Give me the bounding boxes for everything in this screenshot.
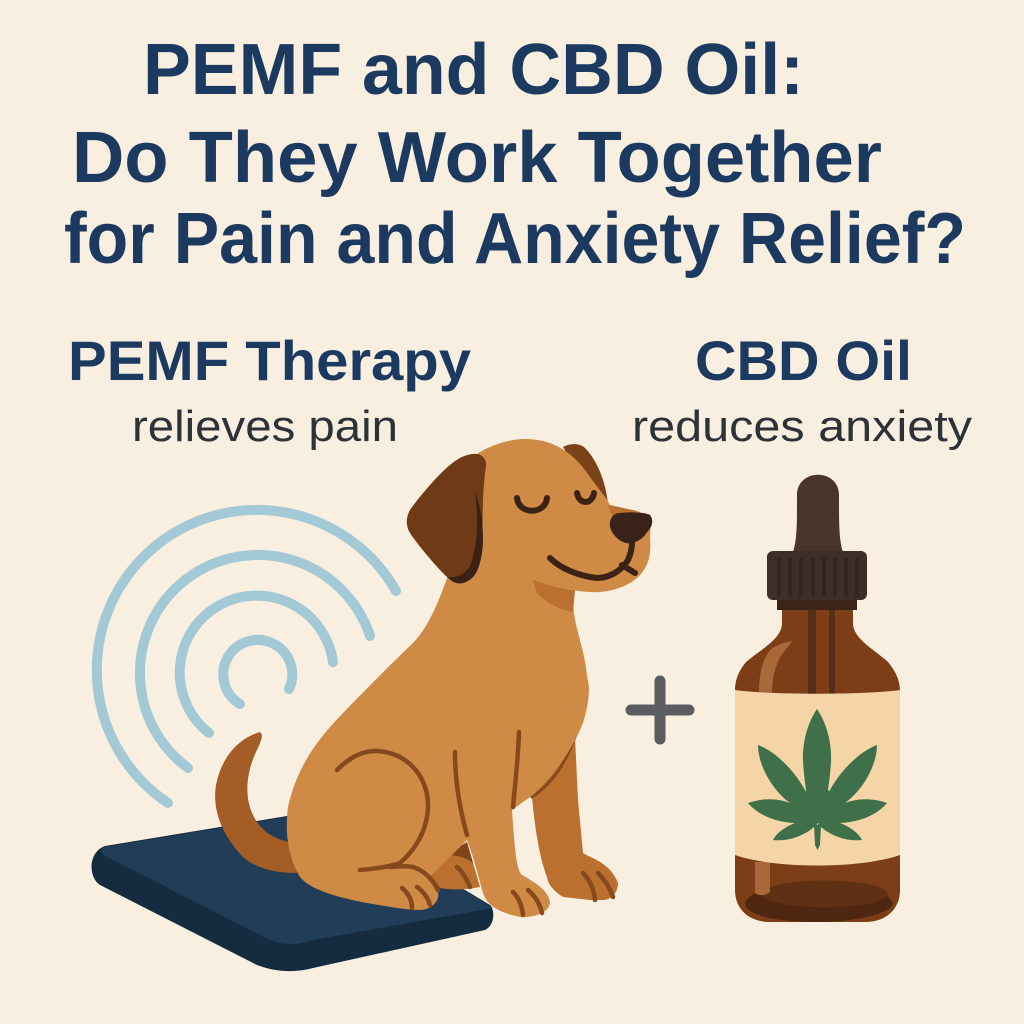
dog body and near front leg — [287, 555, 589, 917]
dropper bulb — [793, 475, 843, 552]
dog haunch line — [337, 751, 438, 890]
dog muzzle shade — [608, 505, 637, 520]
dog far ear — [563, 444, 608, 505]
icon: cannabis leaf — [748, 709, 887, 850]
dog far front leg — [532, 737, 618, 900]
dog paw lines — [402, 867, 613, 915]
dropper tubes — [808, 610, 835, 694]
title — [64, 30, 966, 279]
icon: dog — [215, 439, 652, 917]
dog eyes — [517, 493, 594, 511]
dog tail — [215, 732, 297, 873]
dog rear far foot — [427, 842, 480, 889]
title: PEMF and CBD Oil: — [143, 30, 804, 110]
text: relieves pain: relieves pain — [132, 402, 398, 451]
base shadow — [745, 881, 893, 922]
icon: PEMF waves — [97, 510, 396, 803]
dog ear — [407, 454, 486, 583]
icon: therapy mat — [92, 815, 493, 971]
dog leg lines — [455, 732, 519, 835]
icon: plus sign — [631, 681, 689, 739]
icon: CBD bottle — [735, 475, 900, 922]
dog nose — [610, 512, 652, 543]
heading: PEMF Therapy: PEMF Therapy — [68, 329, 471, 392]
bottle body — [735, 606, 900, 922]
dog ear shadow — [448, 492, 483, 583]
title: for Pain and Anxiety Relief? — [64, 199, 966, 279]
cap ribs — [777, 558, 859, 597]
text: reduces anxiety: reduces anxiety — [632, 402, 972, 451]
dog head — [470, 439, 650, 592]
heading: CBD Oil: CBD Oil — [695, 329, 912, 392]
title: Do They Work Together — [72, 118, 882, 198]
dropper cap — [767, 551, 867, 600]
base highlight — [755, 862, 770, 895]
dropper collar — [777, 598, 857, 610]
bottle highlight — [759, 641, 792, 693]
dog neck fold — [533, 580, 575, 612]
label — [735, 690, 900, 866]
dog mouth — [550, 543, 635, 578]
